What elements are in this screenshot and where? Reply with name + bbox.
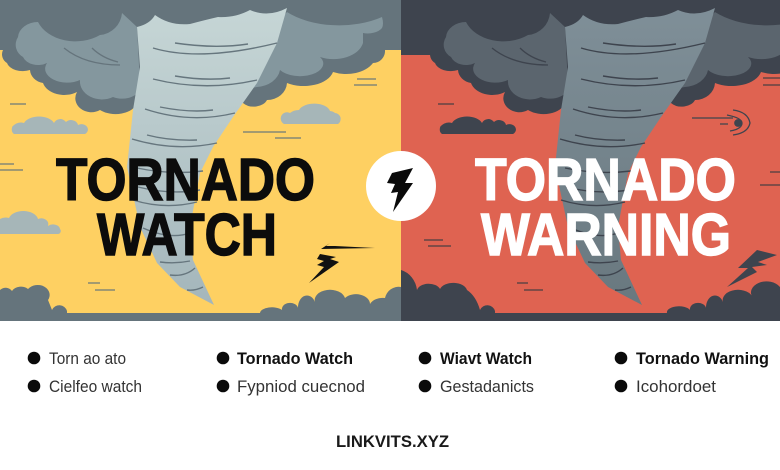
- legend list: [28, 349, 769, 396]
- column 3: [419, 349, 534, 396]
- tornado funnel: watch: [127, 8, 287, 305]
- panel: tornado watch: [0, 0, 401, 321]
- column 3: Gestadanicts: [440, 377, 534, 396]
- tornado funnel: warning: [555, 8, 715, 305]
- icon: center lightning badge: [366, 151, 436, 221]
- title: tornado warning: WARNING: [481, 202, 731, 268]
- wind lines: watch: [0, 79, 377, 290]
- column 2: Fypniod cuecnod: [237, 377, 365, 396]
- ground clouds: watch: [0, 285, 401, 321]
- column 1: [28, 349, 142, 396]
- storm cloud: watch: [0, 0, 401, 114]
- column 1: Cielfeo watch: [49, 377, 142, 396]
- column 2: Tornado Watch: [237, 349, 353, 368]
- column 3: Wiavt Watch: [440, 349, 532, 368]
- column 2: [217, 349, 365, 396]
- storm cloud: warning: [428, 0, 780, 114]
- column 4: [615, 349, 769, 396]
- icon: flying debris: [692, 110, 750, 135]
- lightning bolt: warning: [727, 250, 777, 287]
- column 1: Torn ao ato: [49, 349, 126, 368]
- title: tornado warning: TORNADO: [475, 147, 736, 213]
- small clouds: watch: [0, 104, 341, 234]
- column 4: Icohordoet: [636, 377, 716, 396]
- title: tornado warning: [475, 147, 736, 268]
- ground clouds: warning: [401, 270, 780, 321]
- title: tornado watch: WATCH: [97, 202, 277, 268]
- footer: site name: LINKVITS.XYZ: [336, 432, 449, 451]
- title: tornado watch: [56, 147, 315, 268]
- column 4: Tornado Warning: [636, 349, 769, 368]
- panel: tornado warning: [401, 0, 780, 321]
- title: tornado watch: TORNADO: [56, 147, 315, 213]
- wind lines: warning: [424, 78, 780, 290]
- small cloud: warning: [440, 116, 516, 134]
- lightning bolt: watch: [309, 243, 375, 283]
